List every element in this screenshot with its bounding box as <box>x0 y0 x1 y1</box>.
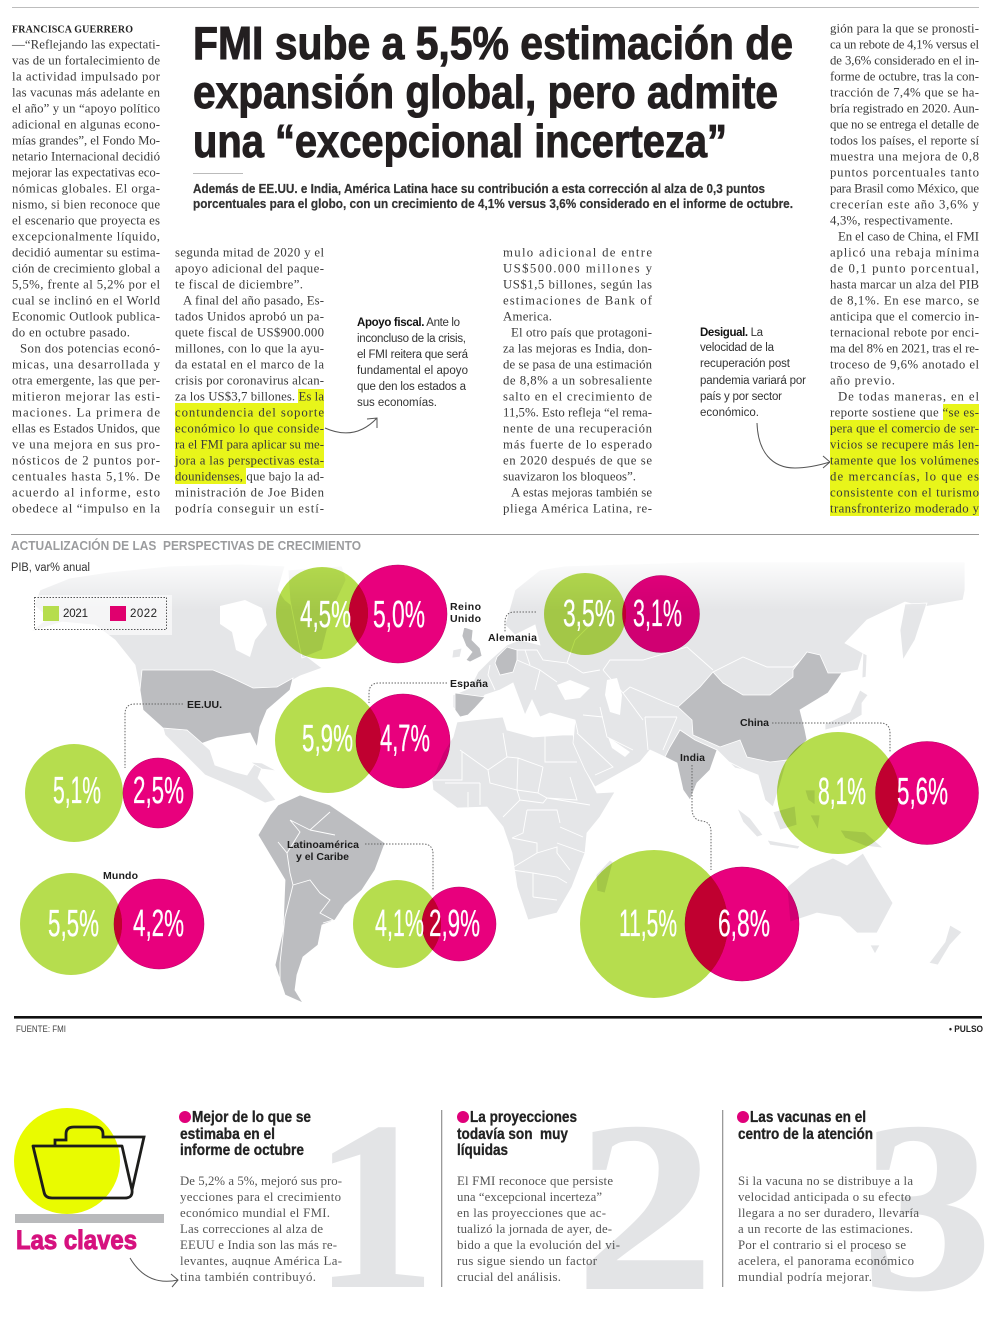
world map <box>30 562 965 1003</box>
bubbles: Mundo: 4,2% <box>133 903 184 945</box>
article column 1: ción de crecimiento global a <box>12 262 160 276</box>
map: Kamchatka <box>900 603 927 660</box>
article column 4 <box>830 22 980 516</box>
map: United States <box>140 670 293 750</box>
title: una “excepcional incerteza” <box>193 115 727 167</box>
key 1: tina también contribuyó. <box>180 1270 316 1284</box>
article column 3: mulo adicional de entre <box>503 246 652 260</box>
map: China <box>678 652 842 762</box>
article column 1: 5,5%, frente al 5,2% por el <box>12 278 160 292</box>
chart heading: ACTUALIZACIÓN DE LAS PERSPECTIVAS DE CRECIMIENTO <box>11 538 361 553</box>
callout: Apoyo fiscal: que den los estados a <box>357 381 467 393</box>
article column 2: A final del año pasado, Es- <box>183 294 324 308</box>
key 2: líquidas <box>457 1142 508 1159</box>
key 2: bido a que la evolución del vi- <box>457 1238 620 1252</box>
article column 1: netario Internacional decidió <box>12 150 160 164</box>
country labels: China <box>740 717 769 729</box>
article column 4: anticipa que el comercio in- <box>830 310 979 324</box>
article column 4: tracción de 7,4% que se ha- <box>830 86 979 100</box>
key 2: crucial del análisis. <box>457 1270 561 1284</box>
article column 4: que no se entrega el detalle de <box>830 118 979 132</box>
key 1: yecciones para el crecimiento <box>180 1190 341 1204</box>
article column 4: año previo. <box>830 374 895 388</box>
map: Australia <box>787 853 893 933</box>
article column 2: ministración de Joe Biden <box>175 486 325 500</box>
key 1: levantes, auqnue América La- <box>180 1254 342 1268</box>
article column 4: vicios se recupere más len- <box>830 438 979 452</box>
article column 2: jora a las perspectivas esta- <box>174 454 324 468</box>
article column 4: aplicó una rebaja mínima <box>830 246 979 260</box>
article column 4: muestra una mejora de 0,8 <box>830 150 979 164</box>
bubbles: Latinoamérica y el Caribe: 2,9% <box>429 903 480 945</box>
key 2: El FMI reconoce que persiste <box>457 1174 613 1188</box>
article column 1: acuerdo al informe, esto <box>12 486 160 500</box>
arrow: Las claves to first key <box>130 1258 178 1287</box>
bubbles: Mundo <box>20 873 204 975</box>
article column 4: puntos porcentuales tanto <box>830 166 979 180</box>
article column 1: vas de un fortalecimiento de <box>12 54 160 68</box>
callout: Apoyo fiscal: Apoyo fiscal. Ante lo <box>357 317 460 329</box>
title <box>193 17 793 167</box>
title: FMI sube a 5,5% estimación de <box>193 17 793 69</box>
bullet <box>457 1111 469 1123</box>
map top fade <box>0 555 1000 610</box>
bubbles: Reino Unido: 5,0% <box>373 594 425 636</box>
article column 1: el escenario que proyecta es <box>12 214 160 228</box>
bubbles: India <box>580 850 799 998</box>
key 3: llegara a no ser duradero, llevaría <box>738 1206 919 1220</box>
article column 2 <box>174 246 325 516</box>
article column 2: te fiscal de diciembre”. <box>175 278 303 292</box>
bubbles: EE.UU.: 2,5% <box>133 770 184 812</box>
article column 1: —“Reflejando las expectati- <box>11 38 160 52</box>
article column 1: nómicas globales. El orga- <box>12 182 160 196</box>
bubbles: España <box>275 687 450 793</box>
article column 1: adicional en algunas econo- <box>12 118 160 132</box>
article column 3: US$500.000 millones y <box>503 262 653 276</box>
key 1 <box>179 1072 437 1317</box>
map: Madagascar <box>596 860 613 893</box>
country labels: España <box>450 678 488 690</box>
article column 1: las vacunas más adelante en <box>12 86 161 100</box>
article column 2: millones, con lo que la ayu- <box>175 342 324 356</box>
country labels: y el Caribe <box>296 851 349 863</box>
article column 3: más fuerte de lo esperado <box>503 438 652 452</box>
article column 4: pera que el comercio de ser- <box>830 422 979 436</box>
leader lines <box>125 612 890 890</box>
map: Tasmania and New Zealand <box>870 925 962 965</box>
key 2: una “excepcional incerteza” <box>457 1190 602 1204</box>
article column 2: económico lo que conside- <box>175 422 324 436</box>
map: India <box>665 730 717 800</box>
callout: Apoyo fiscal: el FMI reitera que será <box>357 349 469 361</box>
subtitle: Además de EE.UU. e India, América Latina hace su contribución a esta corrección al alza de 0,3 puntos <box>193 181 765 196</box>
article column 2: crisis por coronavirus alcan- <box>175 374 324 388</box>
source note: FUENTE: FMI <box>16 1024 66 1034</box>
credit: • PULSO <box>949 1024 983 1034</box>
article column 1: mitieron mejorar las esti- <box>12 390 160 404</box>
key 2: todavía son muy <box>457 1126 568 1143</box>
article column 2: contundencia del soporte <box>175 406 324 420</box>
article column 2: ra el FMI para aplicar su me- <box>175 438 324 452</box>
article column 4: para Brasil como México, que <box>830 182 979 196</box>
article column 4: hasta marcar un alza del PIB <box>830 278 979 292</box>
key 3: Las vacunas en el <box>750 1109 866 1126</box>
bubbles: Reino Unido <box>276 565 447 663</box>
bubbles: Latinoamérica y el Caribe <box>353 880 496 968</box>
article column 1: maciones. La primera de <box>12 406 160 420</box>
article column 3: US$1,5 billones, según las <box>503 278 652 292</box>
article column 4: todos los países, el reporte sí <box>830 134 979 148</box>
callout: Apoyo fiscal: fundamental el apoyo <box>357 365 468 377</box>
heading: Las claves: Las claves <box>16 1225 137 1255</box>
key 3: Por el contrario si el proceso se <box>738 1238 906 1252</box>
callout: Desigual: económico. <box>700 407 759 419</box>
key 2: rus sigue siendo un factor <box>457 1254 598 1268</box>
article column 1: otra emergente, las que per- <box>12 374 160 388</box>
key 1: económico mundial el FMI. <box>180 1206 330 1220</box>
article column 1: mías grandes”, el Fondo Mo- <box>12 134 160 148</box>
key 1: De 5,2% a 5%, mejoró sus pro- <box>180 1174 342 1188</box>
article column 1 <box>11 24 161 516</box>
bubbles: China: 5,6% <box>897 771 948 813</box>
callout: Desigual: pandemia variará por <box>700 375 806 387</box>
article column 1: obedece al “impulso en la <box>12 502 160 516</box>
chart unit note: PIB, var% anual <box>11 562 90 574</box>
arrow: from callout to highlight <box>757 423 830 468</box>
country labels: Unido <box>450 613 481 625</box>
key 3: Si la vacuna no se distribuye a la <box>738 1174 913 1188</box>
map: Ireland <box>452 648 462 658</box>
article column 4: de 8,1%. En ese marco, se <box>830 294 979 308</box>
article column 4: De todas maneras, en el <box>838 390 979 404</box>
callout: Apoyo fiscal <box>357 317 469 409</box>
article column 2: podría conseguir un estí- <box>175 502 324 516</box>
article column 3: salto en el crecimiento de <box>503 390 652 404</box>
article column 4: ca un rebote de 4,1% versus el <box>830 38 979 52</box>
key 1: informe de octubre <box>180 1142 304 1159</box>
callout: Desigual <box>700 327 806 419</box>
key 1: Mejor de lo que se <box>192 1109 311 1126</box>
article column 3: de se pasa de una estimación <box>503 358 653 372</box>
article column 3 <box>503 246 653 516</box>
country labels: Mundo <box>103 870 138 882</box>
article column 4: bría registrado en 2020. Aun- <box>830 102 979 116</box>
article column 1: cual se inclinó en el World <box>12 294 161 308</box>
bubbles: Latinoamérica y el Caribe: 4,1% <box>375 903 424 945</box>
bubbles: China: 8,1% <box>818 771 866 813</box>
subtitle: porcentuales para el globo, con un crecimiento de 4,1% versus 3,6% considerado en el informe de octubre. <box>193 196 793 211</box>
article column 3: en 2020 después de que se <box>503 454 652 468</box>
article column 1: el año” y un “apoyo político <box>12 102 160 116</box>
country labels <box>103 601 769 882</box>
article column 1: la actividad impulsado por <box>12 70 161 84</box>
article column 2: za los US$3,7 billones. Es la <box>175 390 324 404</box>
bubbles: Alemania: 3,1% <box>633 593 682 635</box>
key 2: La proyecciones <box>470 1109 577 1126</box>
article column 4: crecerían este año 3,6% y <box>830 198 980 212</box>
callout: Desigual: país y por sector <box>700 391 782 403</box>
bullet <box>737 1111 749 1123</box>
bubbles: Alemania <box>544 573 700 655</box>
article column 2: apoyo adicional del paque- <box>175 262 324 276</box>
map: Mexico and Central America <box>163 728 276 803</box>
article column 4: transfronterizo moderado y <box>830 502 980 516</box>
bubbles: Reino Unido: 4,5% <box>300 594 351 636</box>
article column 4: de mercancías, lo que es <box>830 470 979 484</box>
key 3: centro de la atención <box>738 1126 873 1143</box>
map: Spain <box>455 693 485 717</box>
key 1: estimaba en el <box>180 1126 275 1143</box>
article column 1: nósticos de 2 puntos por- <box>12 454 160 468</box>
key 1: EEUU e India son las más re- <box>180 1238 337 1252</box>
article column 1: micas, una desarrollada y <box>12 358 161 372</box>
country labels: Latinoamérica <box>287 839 359 851</box>
bubbles: EE.UU.: 5,1% <box>53 770 101 812</box>
map: Indonesia and Philippines <box>737 790 883 849</box>
article column 4: de 0,1 punto porcentual, <box>830 262 979 276</box>
legend <box>30 595 172 635</box>
article column 3: El otro país que protagoni- <box>511 326 652 340</box>
key 3: mundial podría mejorar. <box>738 1270 872 1284</box>
country labels: India <box>680 752 705 764</box>
article column 3: estimaciones de Bank of <box>503 294 653 308</box>
key 3 <box>737 1073 992 1317</box>
bubbles: India: 11,5% <box>619 903 677 945</box>
map: Greenland <box>288 566 346 658</box>
map: North America <box>30 564 322 690</box>
key 3: acelera, el panorama económico <box>738 1254 914 1268</box>
callout: Apoyo fiscal: sus economías. <box>357 397 437 409</box>
article column 3: 11,5%. Esto refleja “el rema- <box>503 406 652 420</box>
article column 3: nente de una recuperación <box>503 422 653 436</box>
article column 4: ma del 8% en 2021, tras el re- <box>830 342 979 356</box>
bullet <box>179 1111 191 1123</box>
subtitle <box>193 181 793 211</box>
article column 1: centuales hasta 5,1%. De <box>12 470 160 484</box>
title: expansión global, pero admite <box>193 66 778 118</box>
article column 3: suavizaron los bloqueos”. <box>503 470 636 484</box>
highlight: yellow passage <box>830 404 979 516</box>
article column 1: Economic Outlook publica- <box>12 310 160 324</box>
article column 1: nismo, si bien reconoce que <box>12 198 160 212</box>
bubbles: EE.UU. <box>25 744 193 842</box>
article column 3: A estas mejoras también se <box>511 486 652 500</box>
article column 4: forme de octubre, tras la con- <box>830 70 979 84</box>
key 3: a un recorte de las estimaciones. <box>738 1222 913 1236</box>
key 2 <box>457 1073 714 1317</box>
map: South America <box>258 795 385 1003</box>
map: Caribbean <box>250 762 277 771</box>
bubbles: España: 5,9% <box>302 718 353 760</box>
country labels: EE.UU. <box>187 699 222 711</box>
article column 2: segunda mitad de 2020 y el <box>175 246 324 260</box>
article column 4: reporte sostiene que “se es- <box>830 406 979 420</box>
article column 2: da estatal en el marco de la <box>175 358 324 372</box>
country labels: Alemania <box>488 632 537 644</box>
article column 2: tados Unidos aprobó un pa- <box>175 310 324 324</box>
bubbles: China <box>777 732 978 854</box>
bubbles: España: 4,7% <box>380 718 430 760</box>
article column 4: consistente con el turismo <box>830 486 979 500</box>
article column 3: de 8,8% a un sobresaliente <box>503 374 652 388</box>
icon: folder on yellow circle <box>14 1108 164 1223</box>
map: United Kingdom <box>462 627 482 662</box>
article column 1: ve una mejora en sus pro- <box>12 438 160 452</box>
article column 4: 4,3%, respectivamente. <box>830 214 953 228</box>
callout: Desigual: recuperación post <box>700 358 791 370</box>
article column 3: pliega América Latina, re- <box>503 502 652 516</box>
map: Hudson Bay <box>220 600 267 657</box>
article column 4: ternacional rebote por enci- <box>830 326 979 340</box>
map: seas <box>557 678 630 757</box>
legend: 2021 <box>63 608 88 620</box>
article column 4: tamente que los volúmenes <box>830 454 979 468</box>
article column 2: quete fiscal de US$900.000 <box>175 326 324 340</box>
key 2: tualizó la jornada de ayer, de- <box>457 1222 612 1236</box>
article column 1: excepcionalmente líquido, <box>12 230 160 244</box>
key 1: Las correcciones al alza de <box>180 1222 323 1236</box>
callout: Desigual: velocidad de la <box>700 342 775 354</box>
article column 1: ellas es Estados Unidos, que <box>12 422 160 436</box>
map: Eurasia <box>453 562 965 807</box>
highlight: yellow passage <box>175 389 324 484</box>
article column 4: de 3,6% considerado en el in- <box>830 54 979 68</box>
country labels: Reino <box>450 601 481 613</box>
article column 3: America. <box>503 310 552 324</box>
legend: 2022 <box>130 608 157 620</box>
article column 1: FRANCISCA GUERRERO <box>12 24 133 36</box>
bubbles: Mundo: 5,5% <box>48 903 99 945</box>
map: Germany <box>495 647 517 675</box>
callout: Desigual: Desigual. La <box>700 327 764 339</box>
arrow: from highlight to callout <box>325 418 377 433</box>
article column 1: Son dos potencias econó- <box>20 342 160 356</box>
article column 2: dounidenses, que bajo la ad- <box>175 470 324 484</box>
callout: Apoyo fiscal: inconcluso de la crisis, <box>357 333 466 345</box>
map: Africa <box>432 717 615 920</box>
bubbles: India: 6,8% <box>718 903 770 945</box>
article column 1: mejorar las expectativas eco- <box>12 166 160 180</box>
article column 4: troceso de 9,6% anotado el <box>830 358 979 372</box>
key 3: velocidad anticipada o su efecto <box>738 1190 911 1204</box>
article column 1: do en octubre pasado. <box>12 326 130 340</box>
article column 4: gión para la que se pronosti- <box>830 22 979 36</box>
article column 4: En el caso de China, el FMI <box>838 230 979 244</box>
map: Japan <box>825 653 868 730</box>
bubbles: Alemania: 3,5% <box>563 593 615 635</box>
key 2: en las proyecciones que ac- <box>457 1206 606 1220</box>
article column 3: za las mejoras es India, don- <box>503 342 652 356</box>
article column 1: decidió aumentar su estima- <box>12 246 160 260</box>
